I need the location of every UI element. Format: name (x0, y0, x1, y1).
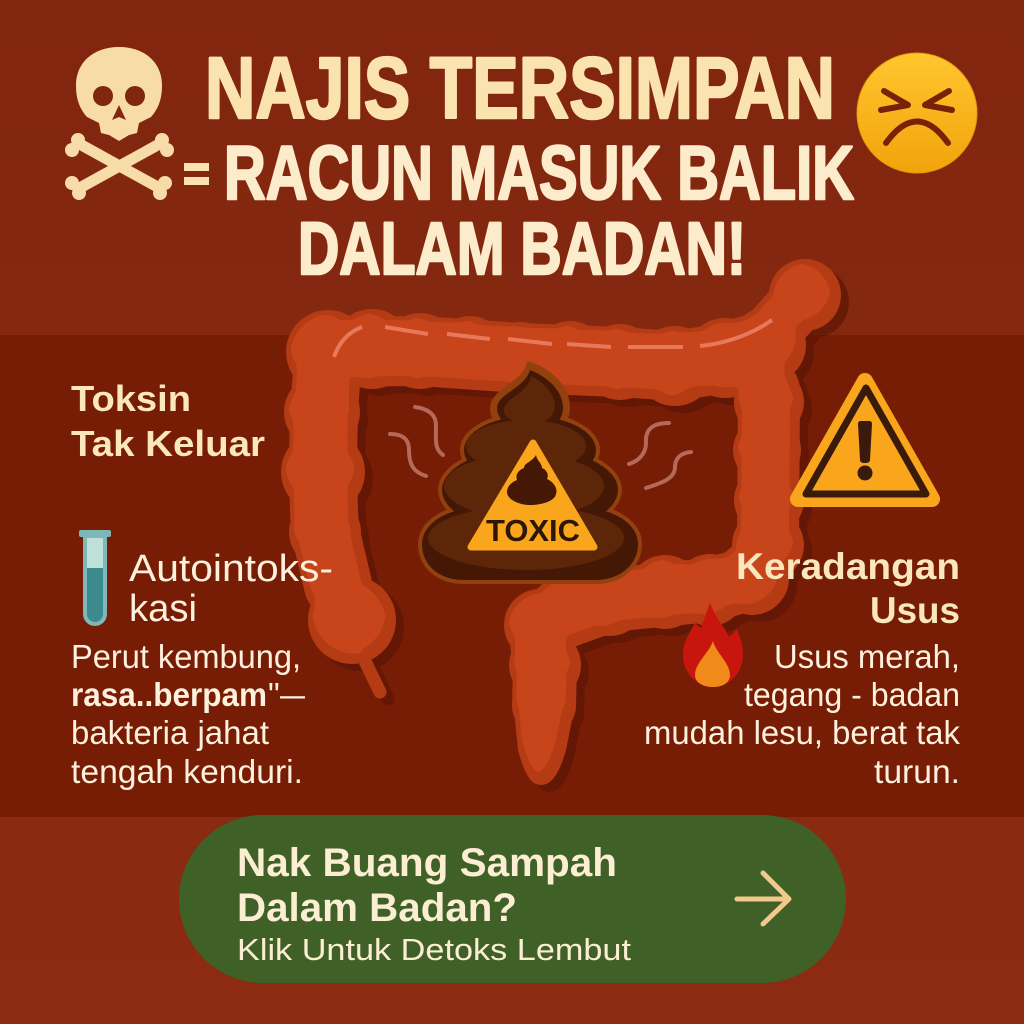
text: autointoksikasi: Autointoks- (129, 548, 333, 590)
icon: test tube (79, 530, 111, 626)
icon: frowning emoji (857, 53, 977, 173)
text: perut kembung: " (268, 676, 280, 713)
text: keradangan usus: Usus (870, 590, 960, 631)
text: perut kembung: Perut kembung, (71, 638, 301, 675)
label: toxic: TOXIC (486, 513, 580, 548)
text: perut kembung: — (280, 676, 305, 713)
button (179, 815, 846, 983)
icon: skull and crossbones (65, 47, 174, 200)
text: usus merah: Usus merah, (774, 638, 960, 675)
text: keradangan usus: Keradangan (736, 546, 960, 587)
text: usus merah (644, 638, 960, 790)
text: toksin: Tak Keluar (71, 423, 265, 464)
button text: Dalam Badan? (237, 886, 517, 930)
middle band (0, 335, 1024, 817)
text: perut kembung: tengah kenduri. (71, 753, 303, 790)
text: usus merah: tegang - badan (744, 676, 960, 713)
stink lines (390, 407, 691, 488)
text: toksin: Toksin (71, 378, 191, 419)
button text: Nak Buang Sampah (237, 841, 617, 885)
text: autointoksikasi (129, 548, 333, 630)
text: toksin (71, 378, 265, 464)
text: usus merah: mudah lesu, berat tak (644, 714, 960, 751)
text: perut kembung (71, 638, 305, 790)
icon: warning triangle (798, 381, 932, 499)
text: usus merah: turun. (874, 753, 960, 790)
title: DALAM BADAN! (298, 207, 746, 290)
icon: toxic poop (422, 366, 638, 580)
text: perut kembung: rasa..berpam (71, 676, 267, 713)
text: perut kembung: bakteria jahat (71, 714, 269, 751)
icon: arrow (737, 873, 789, 924)
icon: flame (683, 602, 743, 687)
title (184, 40, 854, 290)
button text: Klik Untuk Detoks Lembut (237, 932, 631, 967)
button text (237, 841, 631, 967)
text: autointoksikasi: kasi (129, 588, 197, 630)
title: NAJIS TERSIMPAN (205, 40, 835, 137)
text: keradangan usus (736, 546, 960, 631)
illustration: colon (281, 259, 849, 792)
